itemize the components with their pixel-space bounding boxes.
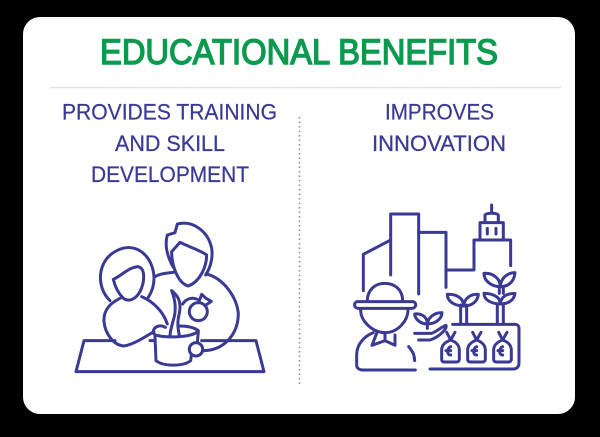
icon: farmer, city and seedlings [355, 205, 519, 370]
heading: improves innovation [372, 100, 506, 156]
icon: adult and child potting a plant [76, 223, 264, 372]
heading: provides training and skill development: AND SKILL [115, 131, 225, 156]
heading: improves innovation: INNOVATION [372, 131, 506, 156]
heading: provides training and skill development: DEVELOPMENT [91, 162, 249, 187]
heading: provides training and skill development [62, 100, 277, 187]
title: EDUCATIONAL BENEFITS [100, 33, 498, 72]
heading: improves innovation: IMPROVES [385, 100, 494, 124]
heading: provides training and skill development: PROVIDES TRAINING [62, 100, 277, 124]
